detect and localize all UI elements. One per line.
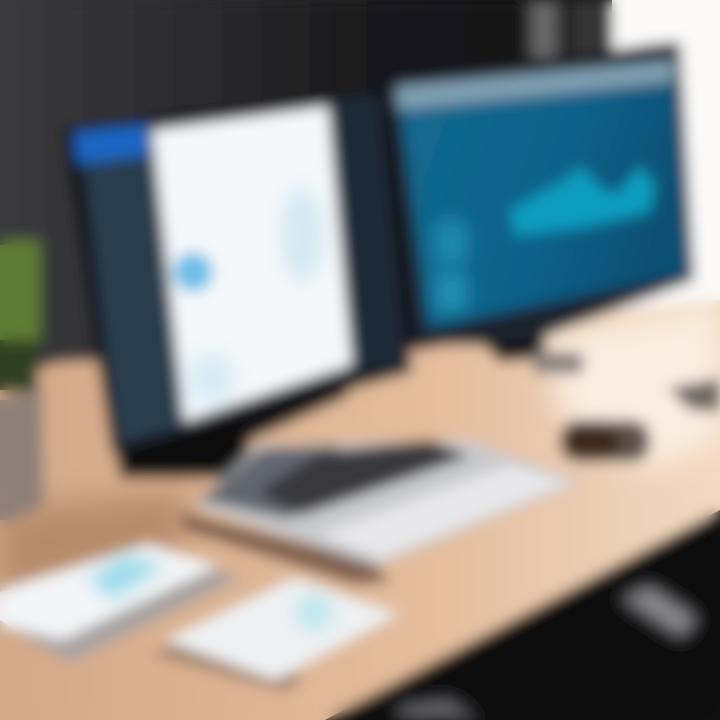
tablet face xyxy=(165,578,398,680)
monitor frame xyxy=(388,42,694,345)
desk surface xyxy=(0,300,720,720)
keyboard xyxy=(180,440,580,585)
tablet face xyxy=(0,544,218,640)
screen pale marks xyxy=(188,187,324,404)
pale sunlit area xyxy=(540,305,720,470)
background wall xyxy=(0,0,720,420)
blue screen xyxy=(400,80,690,328)
dark keys xyxy=(258,440,470,516)
mouse xyxy=(560,420,650,462)
cyan area chart xyxy=(510,166,655,236)
right monitor xyxy=(388,42,694,345)
left bezel xyxy=(84,150,185,445)
plant xyxy=(0,240,44,525)
title strip xyxy=(396,60,674,110)
warm shadow area xyxy=(0,490,190,610)
keyboard base xyxy=(195,440,580,565)
right bezel xyxy=(328,95,405,372)
white screen xyxy=(152,106,352,422)
tablet shadow xyxy=(152,640,305,692)
left monitor stand shadow xyxy=(112,370,350,478)
stand base xyxy=(533,352,583,374)
light keys xyxy=(318,465,570,558)
plant pot xyxy=(0,388,44,525)
blue tab xyxy=(74,124,150,164)
tablet chart xyxy=(88,554,165,600)
right monitor stand xyxy=(470,315,583,374)
right desk object xyxy=(668,378,720,412)
tablet shadow xyxy=(0,545,240,662)
screen blue circle xyxy=(173,252,213,292)
keyboard shadow xyxy=(180,512,390,585)
under-desk dark area xyxy=(325,510,720,720)
tablet chart xyxy=(296,594,332,630)
tablet left xyxy=(0,544,240,662)
tablet right xyxy=(152,578,398,692)
cyan side bars xyxy=(435,220,467,312)
monitor outer frame xyxy=(62,90,412,455)
left monitor xyxy=(62,90,412,455)
grey left side xyxy=(200,445,340,520)
